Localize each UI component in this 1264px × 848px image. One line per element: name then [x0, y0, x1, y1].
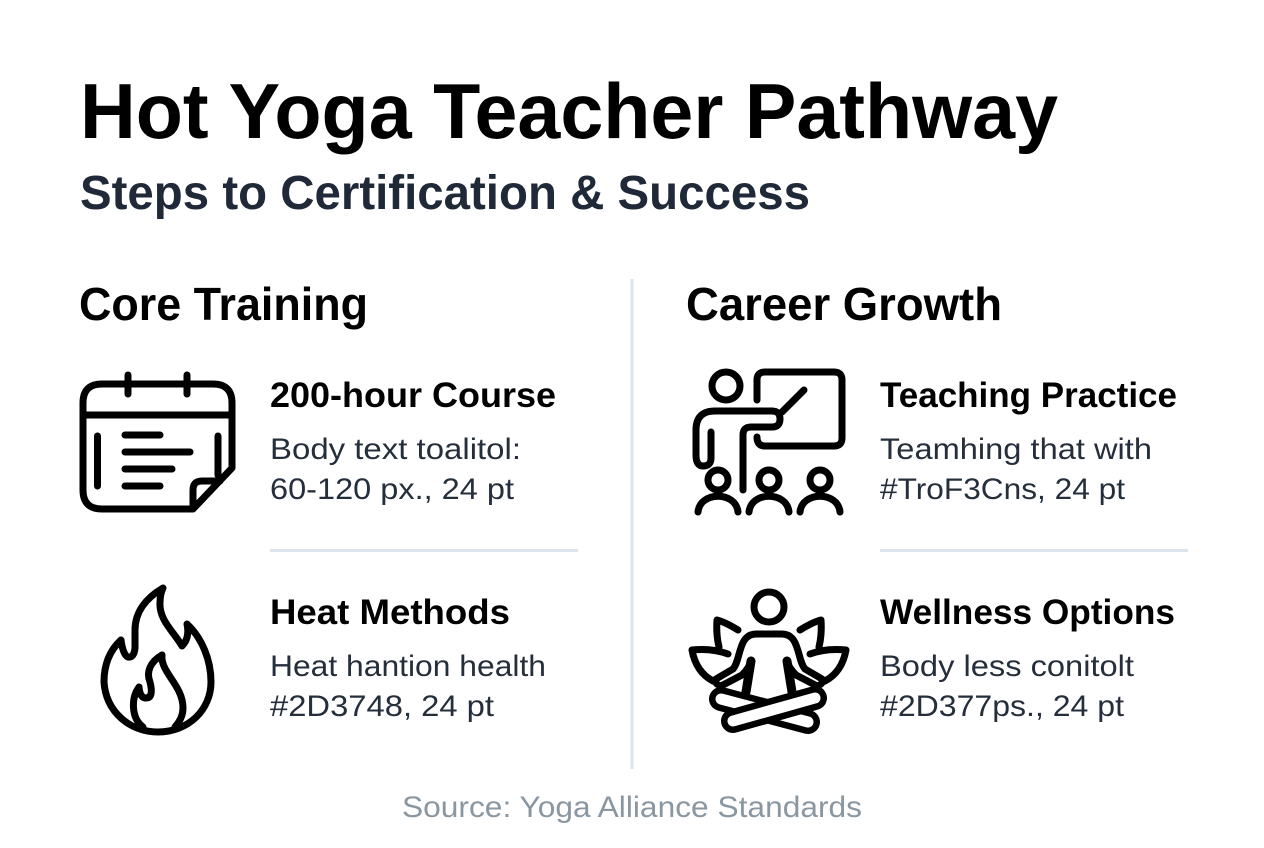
subtitle: Steps to Certification & Success: [80, 167, 810, 220]
item: 200-hour course: 60-120 px., 24 pt: [270, 473, 515, 506]
item: 200-hour course: 200-hour Course: [270, 376, 556, 415]
item: heat methods: Heat Methods: [270, 593, 510, 632]
heading: core training: Core Training: [79, 278, 368, 330]
item: heat methods: [270, 593, 546, 723]
item: heat methods: Heat hantion health: [270, 650, 546, 683]
item: wellness options: Body less conitolt: [880, 650, 1135, 683]
item: 200-hour course: Body text toalitol:: [270, 433, 521, 466]
item: wellness options: [880, 593, 1175, 723]
item: teaching practice: Teamhing that with: [880, 433, 1152, 466]
item: teaching practice: [880, 376, 1177, 506]
icon: teacher at board: [696, 372, 842, 512]
source note: Source: Yoga Alliance Standards: [402, 791, 862, 824]
title: Hot Yoga Teacher Pathway: [80, 67, 1058, 155]
item: heat methods: #2D3748, 24 pt: [270, 690, 495, 723]
icon: calendar: [83, 375, 232, 509]
icon: flame: [104, 588, 211, 732]
heading: career growth: Career Growth: [686, 278, 1002, 330]
icon: meditation figure: [692, 592, 846, 722]
item: wellness options: #2D377ps., 24 pt: [880, 690, 1125, 723]
item: teaching practice: Teaching Practice: [880, 376, 1177, 415]
item: wellness options: Wellness Options: [880, 593, 1175, 632]
item: 200-hour course: [270, 376, 556, 506]
item: teaching practice: #TroF3Cns, 24 pt: [880, 473, 1126, 506]
